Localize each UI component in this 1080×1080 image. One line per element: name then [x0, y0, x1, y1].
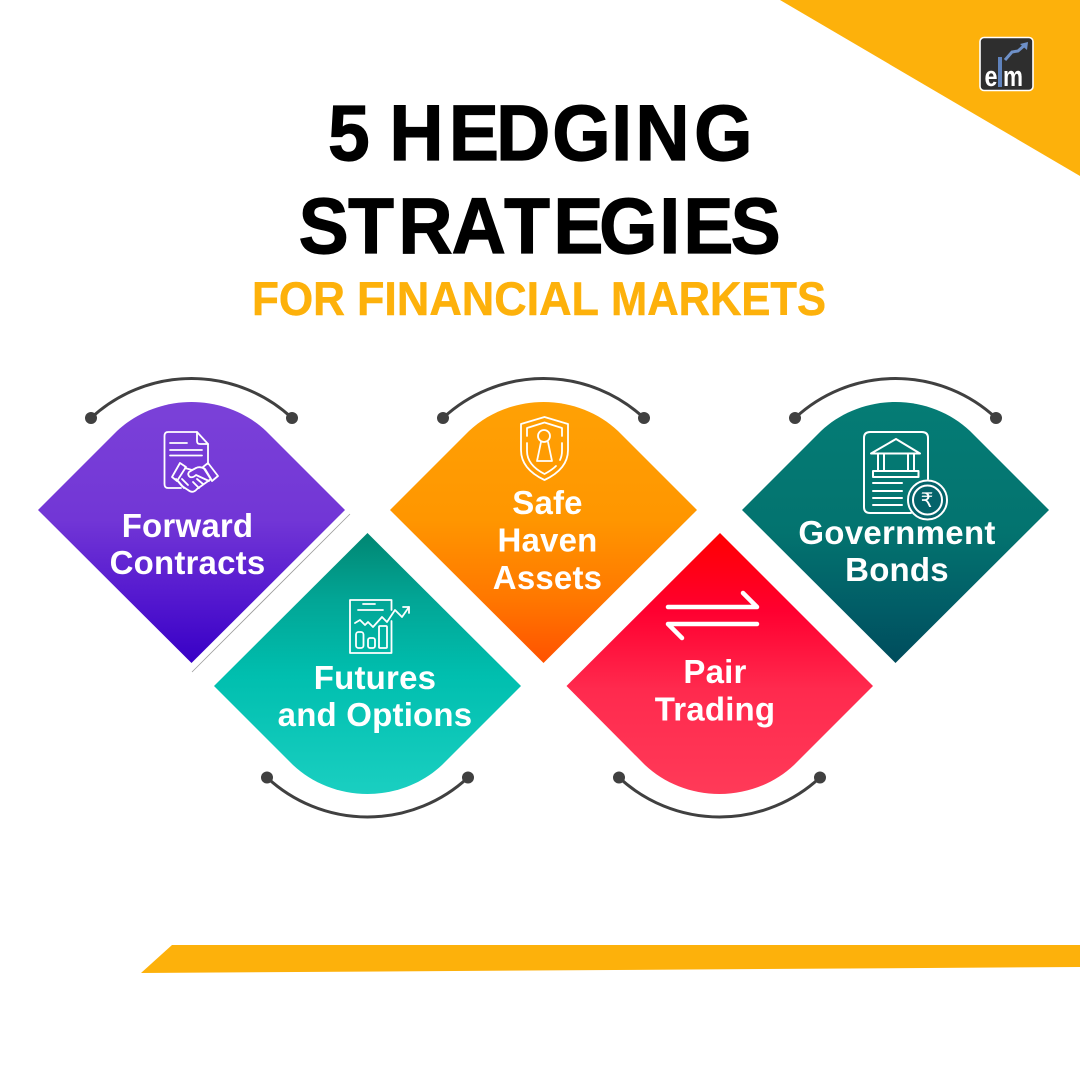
icon: exchange arrows [668, 593, 757, 638]
label: forward contracts: Contracts [110, 544, 265, 581]
panel: government bonds [742, 378, 1049, 663]
logo: e [984, 61, 998, 93]
label: government bonds: Bonds [845, 551, 949, 588]
bottom bar [141, 945, 1080, 973]
subtitle: FOR [252, 272, 345, 325]
label: forward contracts [110, 507, 265, 581]
icon: shield with keyhole [521, 417, 568, 480]
label: forward contracts: Forward [122, 507, 253, 544]
logo: m [1003, 61, 1023, 93]
corner triangle [780, 0, 1080, 176]
divider line [192, 514, 350, 672]
label: pair trading: Pair [683, 653, 747, 690]
subtitle: FINANCIAL [357, 272, 599, 325]
label: futures and options: and Options [278, 696, 472, 733]
icon: bank document with rupee coin: ₹ [921, 488, 933, 512]
diamond: futures and options [214, 533, 521, 794]
title: STRATEGIES [299, 182, 781, 270]
logo [980, 38, 1033, 93]
arc: safe haven assets [437, 378, 650, 424]
label: safe haven assets: Assets [493, 559, 602, 596]
label: futures and options: Futures [314, 659, 436, 696]
label: government bonds [798, 514, 996, 588]
arc: pair trading [613, 772, 826, 817]
subtitle: MARKETS [611, 272, 826, 325]
diamond: forward contracts [38, 402, 345, 663]
diamond: government bonds [742, 402, 1049, 663]
panel: futures and options [214, 533, 521, 817]
title [299, 89, 781, 270]
label: government bonds: Government [798, 514, 996, 551]
title: 5 HEDGING [328, 89, 753, 177]
arc: government bonds [789, 378, 1002, 424]
label: futures and options [278, 659, 472, 733]
label: pair trading [655, 653, 775, 728]
diamond: safe haven assets [390, 402, 697, 663]
arc: forward contracts [85, 378, 298, 424]
subtitle [252, 272, 826, 325]
label: pair trading: Trading [655, 690, 775, 728]
diamond: pair trading [566, 533, 873, 794]
icon: bank document with rupee coin [864, 432, 947, 520]
panel: pair trading [566, 533, 873, 817]
label: safe haven assets: Safe [512, 484, 583, 521]
panel: forward contracts [38, 378, 345, 663]
panel: safe haven assets [390, 378, 697, 663]
arc: futures and options [261, 772, 474, 817]
icon: chart report [350, 600, 409, 653]
label: safe haven assets: Haven [497, 522, 598, 558]
label: safe haven assets [493, 484, 602, 596]
icon: contract and handshake [164, 432, 218, 492]
